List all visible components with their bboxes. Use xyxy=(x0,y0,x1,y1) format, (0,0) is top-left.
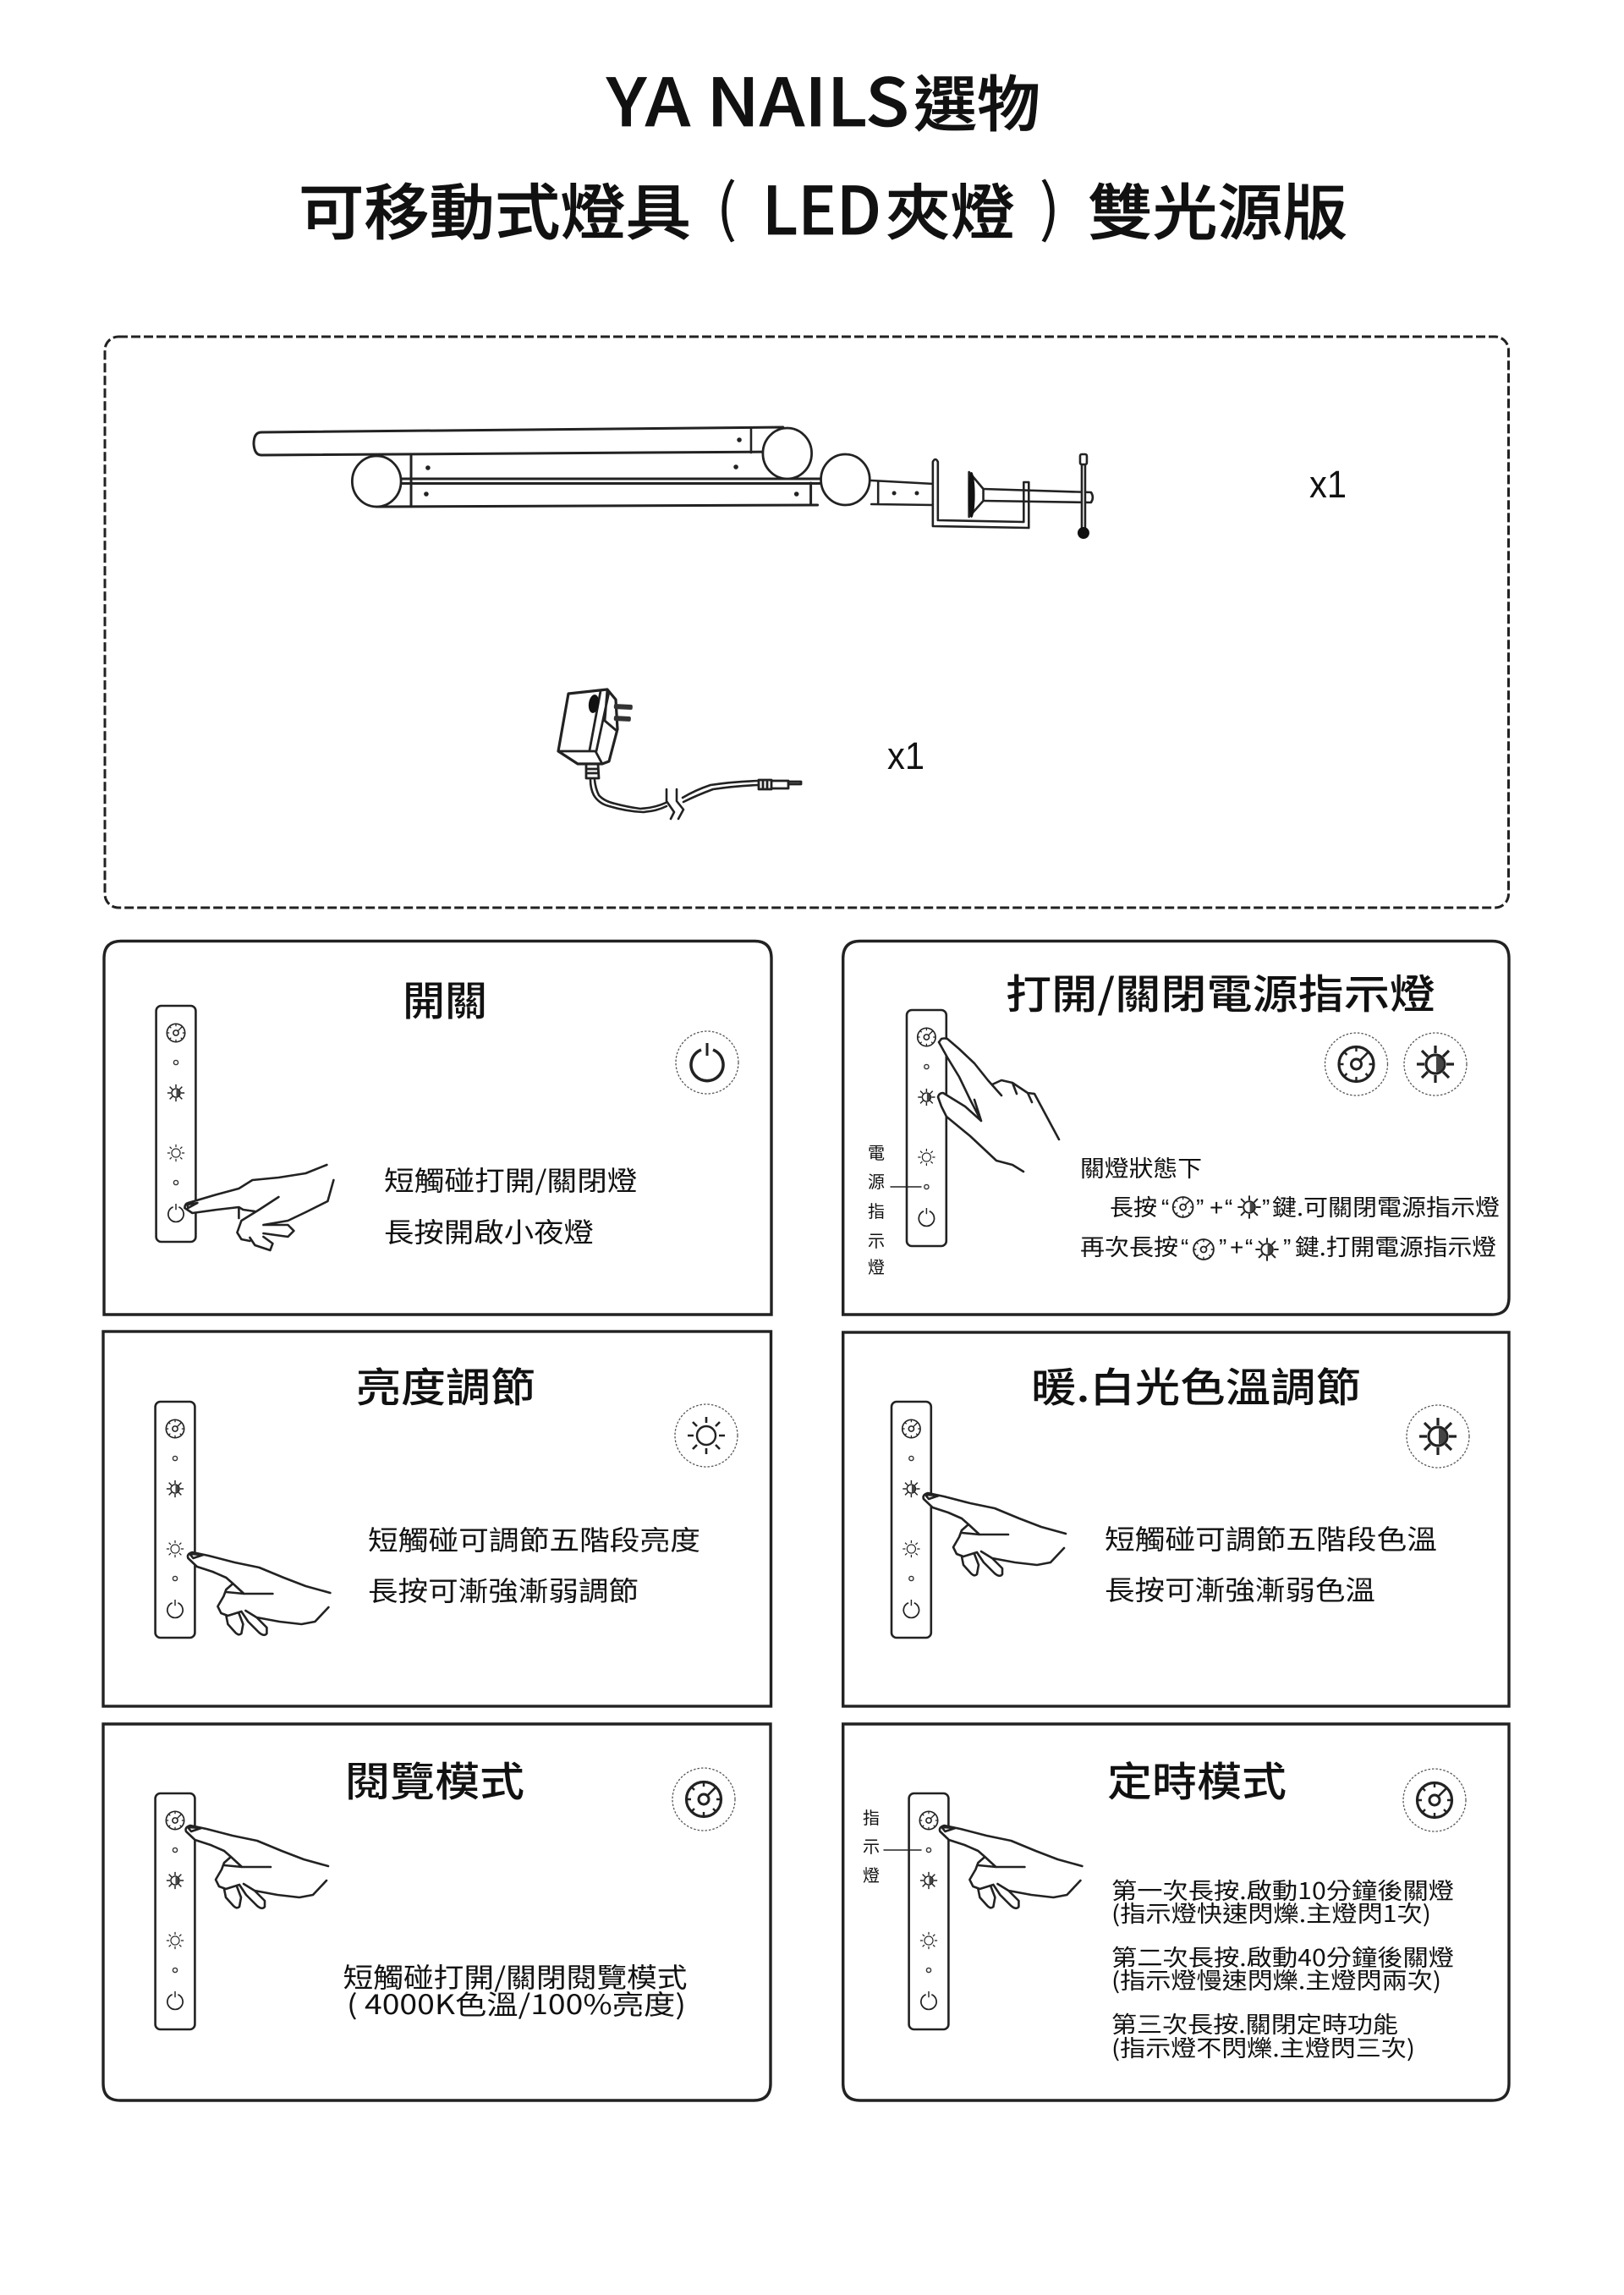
instruction text: 長按開啟小夜燈 xyxy=(384,1211,594,1250)
hand pointing at mode button xyxy=(186,1826,328,1908)
instruction text: 長按 xyxy=(1110,1189,1157,1222)
instruction text: 長按可漸強漸弱調節 xyxy=(368,1570,639,1609)
icons: timer and colour buttons xyxy=(1325,1033,1467,1095)
quantity: lamp x1: x1 xyxy=(1309,463,1347,506)
instruction text: “ xyxy=(1181,1234,1188,1260)
label: power indicator xyxy=(868,1139,921,1278)
instruction text: + xyxy=(1230,1234,1243,1260)
control strip xyxy=(156,1402,195,1638)
icon: brightness button xyxy=(675,1404,738,1467)
icon: colour button xyxy=(1407,1405,1469,1468)
instruction text: 長按可漸強漸弱色溫 xyxy=(1105,1569,1375,1608)
title: brand line xyxy=(606,51,1040,145)
title: product name: ) xyxy=(1039,158,1061,249)
instruction text: 短觸碰可調節五階段亮度 xyxy=(368,1519,700,1558)
hand pointing at brightness button xyxy=(188,1552,330,1635)
icon: power button xyxy=(676,1031,738,1094)
title: product name: 可移動式燈具 xyxy=(299,163,691,252)
instruction text: 短觸碰打開/關閉閱覽模式 xyxy=(343,1957,687,1996)
illustration: power adapter xyxy=(558,689,801,819)
instruction text: ( 4000K色溫/100%亮度) xyxy=(347,1984,686,2023)
control strip xyxy=(907,1010,946,1246)
instruction text: 鍵.可關閉電源指示燈 xyxy=(1272,1189,1500,1222)
heading: 定時模式 xyxy=(1107,1749,1287,1808)
label: power indicator: 示 xyxy=(868,1227,885,1252)
instruction text: ” xyxy=(1196,1194,1204,1221)
label: indicator: 指 xyxy=(863,1804,880,1829)
instruction text xyxy=(1111,1873,1454,2063)
heading: 亮度調節 xyxy=(356,1354,535,1414)
instruction text: 鍵.打開電源指示燈 xyxy=(1295,1229,1496,1262)
label: power indicator: 源 xyxy=(868,1168,885,1193)
instruction text: ” xyxy=(1283,1234,1291,1260)
panel: reading mode xyxy=(103,1724,771,2100)
instruction text: “ xyxy=(1245,1234,1253,1260)
instruction text: “ xyxy=(1225,1194,1232,1221)
heading: 閱覽模式 xyxy=(345,1749,524,1808)
label: power indicator: 燈 xyxy=(868,1254,885,1278)
instruction text xyxy=(368,1519,700,1609)
hand pointing at timer button xyxy=(940,1826,1082,1908)
instruction text: 關燈狀態下 xyxy=(1080,1150,1202,1183)
control strip xyxy=(892,1402,931,1638)
hand pointing at colour button xyxy=(924,1493,1066,1576)
panel: package contents xyxy=(105,337,1509,908)
instruction text: “ xyxy=(1161,1194,1169,1221)
label: indicator: 示 xyxy=(863,1833,880,1858)
illustration: clamp lamp xyxy=(254,427,1093,539)
label: indicator: 燈 xyxy=(863,1862,880,1886)
control strip xyxy=(156,1006,195,1242)
label: power indicator: 指 xyxy=(868,1198,885,1222)
instruction text xyxy=(1080,1150,1500,1262)
label: indicator xyxy=(863,1804,921,1886)
instruction text: 短觸碰打開/關閉燈 xyxy=(384,1160,638,1199)
instruction text: + xyxy=(1210,1194,1223,1221)
instruction text: 第三次長按.關閉定時功能 xyxy=(1111,2007,1398,2040)
instruction text: 第二次長按.啟動40分鐘後關燈 xyxy=(1111,1940,1454,1973)
instruction text: ” xyxy=(1219,1234,1226,1260)
control strip xyxy=(909,1793,948,2029)
panel: colour temperature xyxy=(843,1332,1509,1706)
title: product name: 雙光源版 xyxy=(1088,163,1347,252)
title: brand line: 選物 xyxy=(914,55,1040,144)
heading: 暖.白光色溫調節 xyxy=(1031,1354,1361,1414)
heading: 打開/關閉電源指示燈 xyxy=(1006,961,1435,1020)
hand pointing at power button xyxy=(184,1165,333,1250)
instruction text: (指示燈慢速閃爍.主燈閃兩次) xyxy=(1111,1963,1441,1996)
quantity: adapter x1: x1 xyxy=(887,734,924,777)
icon: timer button xyxy=(1403,1769,1466,1831)
panel: timer mode xyxy=(843,1724,1509,2100)
title: product name: LED xyxy=(762,159,881,254)
panel: brightness xyxy=(103,1331,771,1706)
title: brand line: YA NAILS xyxy=(606,51,909,145)
instruction text: 短觸碰可調節五階段色溫 xyxy=(1105,1518,1437,1557)
panel: power indicator on/off xyxy=(843,941,1509,1315)
instruction text: (指示燈不閃爍.主燈閃三次) xyxy=(1111,2030,1415,2063)
instruction text: 第一次長按.啟動10分鐘後關燈 xyxy=(1111,1873,1454,1906)
instruction text: ” xyxy=(1262,1194,1270,1221)
panel: power switch xyxy=(104,941,771,1315)
icon: mode button xyxy=(672,1768,735,1831)
instruction text: (指示燈快速閃爍.主燈閃1次) xyxy=(1111,1896,1431,1929)
instruction text xyxy=(1105,1518,1437,1608)
title: product name: 夾燈 xyxy=(886,163,1015,252)
title: product name: ( xyxy=(716,158,738,249)
instruction text xyxy=(343,1957,687,2023)
control strip xyxy=(156,1793,195,2029)
instruction text: 再次長按 xyxy=(1080,1229,1178,1262)
label: power indicator: 電 xyxy=(868,1139,885,1164)
hand pressing two buttons xyxy=(938,1039,1059,1172)
heading: 開關 xyxy=(403,968,487,1027)
title: product name xyxy=(299,158,1347,254)
instruction text xyxy=(384,1160,638,1250)
